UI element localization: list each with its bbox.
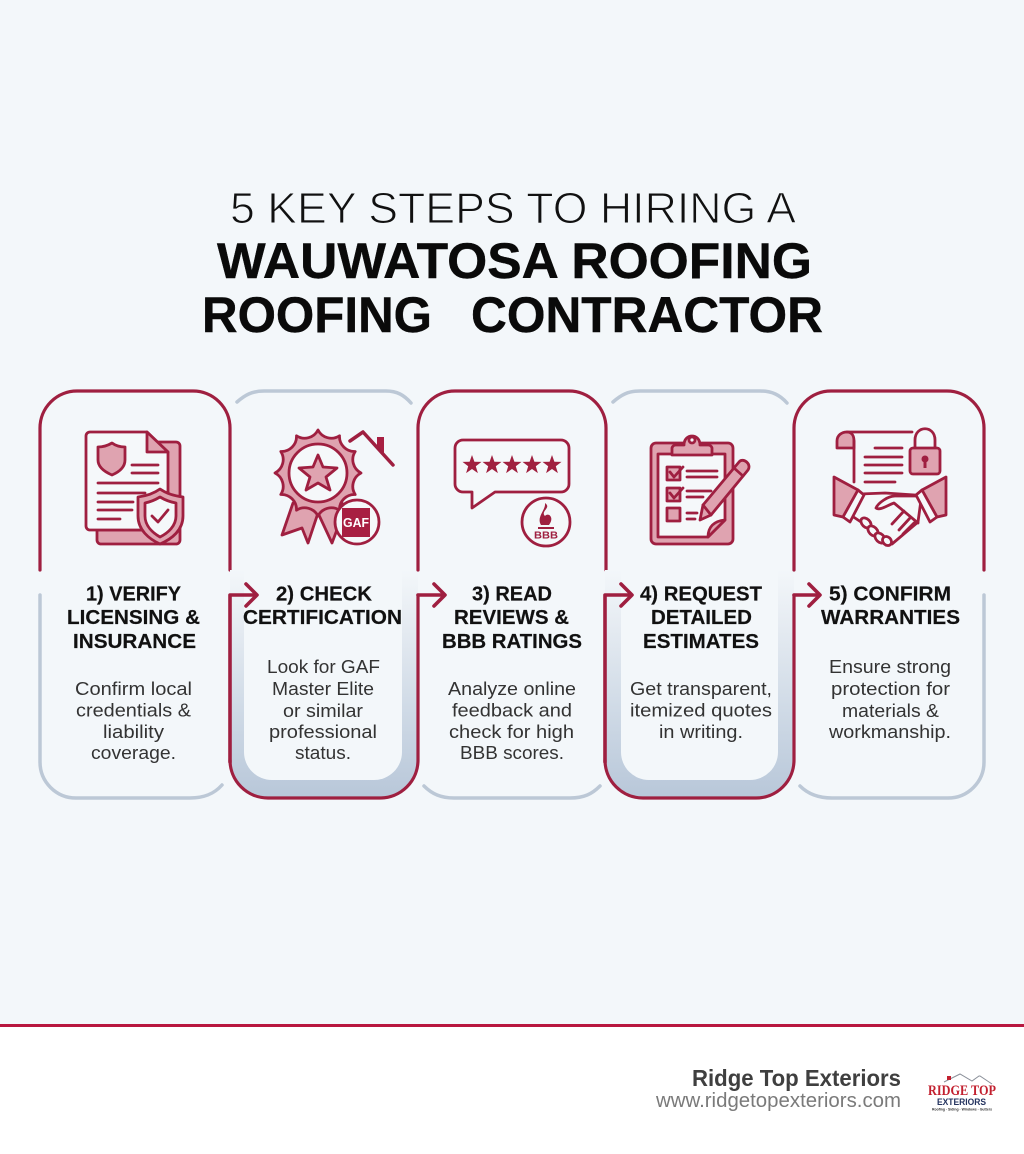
- text: step 3 description: [448, 679, 576, 763]
- text: step 5 description: materials &: [842, 701, 939, 721]
- panel: step 5 confirm warranties: [794, 391, 984, 798]
- text: step 4 description: itemized quotes: [630, 700, 772, 720]
- heading: step 5: [821, 582, 960, 629]
- icon: certification rosette with GAF badge: [275, 430, 393, 544]
- footer: company name and website: www.ridgetopexteriors.com: [655, 1090, 901, 1112]
- title: CONTRACTOR: [471, 287, 823, 343]
- heading: step 2: 2) CHECK: [276, 582, 372, 606]
- footer band: [0, 1024, 1024, 1154]
- heading: step 1: [67, 582, 200, 653]
- text: step 3 description: Analyze online: [448, 679, 576, 699]
- arrow: step 2 to step 3: [418, 584, 445, 606]
- text: step 2 description: [267, 657, 380, 763]
- title: [202, 184, 823, 343]
- text: step 2 description: Look for GAF: [267, 657, 380, 677]
- text: step 4 description: in writing.: [659, 722, 743, 742]
- heading: step 5: 5) CONFIRM: [829, 582, 951, 606]
- heading: step 1: INSURANCE: [73, 630, 196, 653]
- panel: step 2 check certification: [230, 391, 418, 798]
- text: step 5 description: Ensure strong: [829, 657, 951, 677]
- heading: step 3: BBB RATINGS: [442, 630, 582, 653]
- footer: company name and website: [655, 1065, 901, 1112]
- text: step 2 description: Master Elite: [272, 679, 374, 699]
- logo: Ridge Top Exteriors: [928, 1074, 996, 1112]
- heading: step 2: [243, 582, 402, 629]
- text: step 1 description: coverage.: [91, 743, 176, 763]
- text: step 4 description: Get transparent,: [630, 679, 772, 699]
- text: step 1 description: Confirm local: [75, 679, 192, 699]
- title: WAUWATOSA ROOFING: [217, 233, 812, 289]
- heading: step 2: CERTIFICATION: [243, 606, 402, 629]
- logo: Ridge Top Exteriors: EXTERIORS: [937, 1097, 986, 1108]
- logo: Ridge Top Exteriors: RIDGE TOP: [928, 1083, 996, 1099]
- heading: step 1: LICENSING &: [67, 606, 200, 629]
- arrow: step 4 to step 5: [794, 584, 820, 606]
- heading: step 5: WARRANTIES: [821, 606, 960, 629]
- icon: clipboard checklist with pencil: [651, 436, 749, 544]
- text: step 2 description: status.: [295, 743, 351, 763]
- heading: step 3: 3) READ: [472, 582, 552, 606]
- text: step 2 description: or similar: [283, 701, 363, 721]
- text: step 2 description: professional: [269, 722, 377, 742]
- text: step 1 description: credentials &: [76, 700, 191, 720]
- text: step 1 description: [75, 679, 192, 763]
- icon: certification rosette with GAF badge: GAF: [343, 515, 369, 530]
- panel: step 4 request detailed estimates: [605, 391, 794, 798]
- heading: step 4: DETAILED: [651, 606, 752, 629]
- title: 5 KEY STEPS TO HIRING A: [230, 184, 797, 233]
- heading: step 3: REVIEWS &: [454, 606, 569, 629]
- text: step 3 description: feedback and: [452, 700, 572, 720]
- footer: company name and website: Ridge Top Exteriors: [692, 1065, 901, 1091]
- icon: warranty scroll, lock and handshake: [834, 429, 946, 547]
- text: step 4 description: [630, 679, 772, 742]
- panel: step 3 read reviews and BBB ratings: [418, 391, 606, 798]
- text: step 5 description: protection for: [831, 679, 950, 699]
- text: step 5 description: [828, 657, 951, 742]
- text: step 3 description: BBB scores.: [460, 743, 564, 763]
- heading: step 3: [442, 582, 582, 653]
- icon: review bubble with stars and BBB seal: [455, 440, 570, 546]
- icon: document with shield: [86, 432, 183, 544]
- heading: step 4: [640, 582, 762, 653]
- heading: step 1: 1) VERIFY: [86, 582, 181, 606]
- logo: Ridge Top Exteriors: Roofing · Siding · Windows · Gutters: [932, 1106, 993, 1112]
- arrow: step 3 to step 4: [605, 584, 632, 762]
- panel: step 1 verify licensing and insurance: [40, 391, 230, 798]
- text: step 1 description: liability: [103, 722, 164, 742]
- text: step 5 description: workmanship.: [828, 722, 951, 742]
- icon: review bubble with stars and BBB seal: BBB: [534, 530, 558, 542]
- text: step 3 description: check for high: [449, 722, 574, 742]
- heading: step 4: 4) REQUEST: [640, 582, 762, 606]
- heading: step 4: ESTIMATES: [643, 630, 759, 653]
- arrow: step 1 to step 2: [230, 584, 257, 762]
- title: ROOFING: [202, 287, 432, 343]
